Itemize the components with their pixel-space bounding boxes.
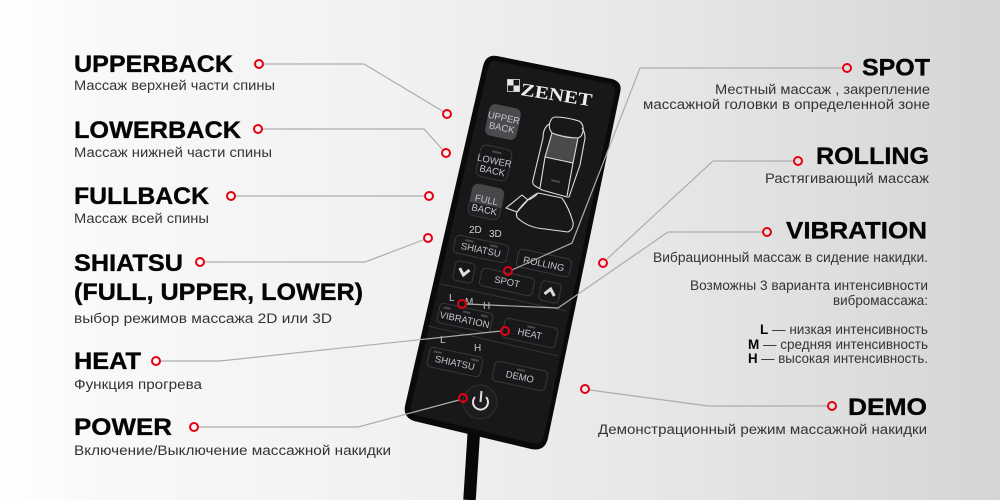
shiatsu intensity button	[427, 347, 483, 377]
vibration label: VIBRATION	[786, 218, 927, 244]
shiatsu label: (FULL, UPPER, LOWER)	[74, 279, 363, 306]
shiatsu intensity button: SHIATSU	[434, 354, 476, 373]
upperback label: UPPERBACK	[74, 51, 233, 78]
vibration L M H labels: L	[449, 293, 455, 304]
demo label: DEMO	[848, 394, 927, 421]
lower back button	[474, 144, 514, 182]
vibration L M H labels: M	[465, 297, 473, 308]
shiatsu label: выбор режимов массажа 2D или 3D	[74, 311, 332, 326]
heat button: HEAT	[516, 327, 543, 342]
upper back button: BACK	[488, 120, 516, 137]
vibration label: M — средняя интенсивность	[748, 337, 928, 352]
shiatsu button: SHIATSU	[460, 241, 502, 260]
rolling label: ROLLING	[816, 143, 929, 170]
upper back button: UPPER	[487, 110, 521, 127]
vibration L M H labels: H	[483, 301, 490, 312]
vibration label: H — высокая интенсивность.	[748, 351, 928, 366]
remote control panel	[405, 56, 621, 450]
vibration button	[437, 303, 493, 333]
heat label: HEAT	[74, 348, 141, 375]
shiatsu L H labels: H	[474, 343, 481, 354]
spot button: SPOT	[493, 274, 521, 291]
spot label	[643, 54, 930, 112]
power label: POWER	[74, 414, 172, 441]
spot label: Местный массаж , закрепление	[715, 82, 930, 97]
demo label: Демонстрационный режим массажной накидки	[598, 422, 927, 437]
upperback label	[74, 51, 275, 93]
fullback label	[74, 183, 209, 226]
lower back button: BACK	[478, 163, 507, 180]
shiatsu L H labels: L	[440, 335, 446, 346]
shiatsu button	[453, 235, 509, 263]
heat button	[502, 318, 558, 348]
vibration button: VIBRATION	[439, 310, 490, 331]
vibration label: Вибрационный массаж в сидение накидки.	[653, 250, 928, 265]
shiatsu L H labels	[440, 335, 481, 354]
power label: Включение/Выключение массажной накидки	[74, 443, 391, 458]
logo: ZENET	[519, 79, 594, 110]
full back button: BACK	[470, 202, 499, 219]
shiatsu label	[74, 250, 363, 326]
cable	[470, 430, 474, 500]
2D 3D labels	[469, 225, 502, 240]
callout markers	[152, 60, 851, 431]
vibration L M H labels	[449, 293, 490, 312]
rolling label: Растягивающий массаж	[765, 171, 929, 186]
spot label: SPOT	[862, 54, 930, 82]
upperback label: Массаж верхней части спины	[74, 78, 275, 93]
full back button	[467, 183, 505, 221]
lowerback label: LOWERBACK	[74, 117, 241, 144]
vibration label: Возможны 3 варианта интенсивности	[690, 278, 928, 293]
shiatsu label: SHIATSU	[74, 250, 183, 277]
vibration label: вибромассажа:	[833, 293, 928, 308]
full back button: FULL	[474, 193, 499, 208]
rolling button: ROLLING	[522, 255, 565, 274]
demo label	[598, 394, 927, 437]
heat label: Функция прогрева	[74, 377, 203, 392]
demo button	[492, 361, 548, 391]
leader lines	[161, 64, 842, 427]
power label	[74, 414, 391, 458]
up arrow button	[538, 280, 562, 304]
fullback label: Массаж всей спины	[74, 211, 209, 226]
spot label: массажной головки в определенной зоне	[643, 97, 930, 112]
upper back button	[484, 103, 522, 141]
vibration label	[653, 218, 928, 366]
seat illustration	[506, 117, 585, 232]
fullback label: FULLBACK	[74, 183, 209, 210]
lowerback label: Массаж нижней части спины	[74, 145, 272, 160]
demo button: DEMO	[505, 369, 535, 386]
2D 3D labels: 2D	[469, 225, 482, 236]
rolling label	[765, 143, 929, 186]
spot button	[479, 268, 535, 296]
lowerback label	[74, 117, 272, 160]
power button	[463, 385, 497, 419]
logo	[508, 79, 594, 110]
lower back button: LOWER	[476, 153, 513, 171]
vibration label: L — низкая интенсивность	[760, 322, 928, 337]
down arrow button	[452, 260, 476, 284]
rolling button	[516, 249, 572, 277]
2D 3D labels: 3D	[489, 229, 502, 240]
heat label	[74, 348, 203, 392]
divider lines	[428, 284, 566, 356]
